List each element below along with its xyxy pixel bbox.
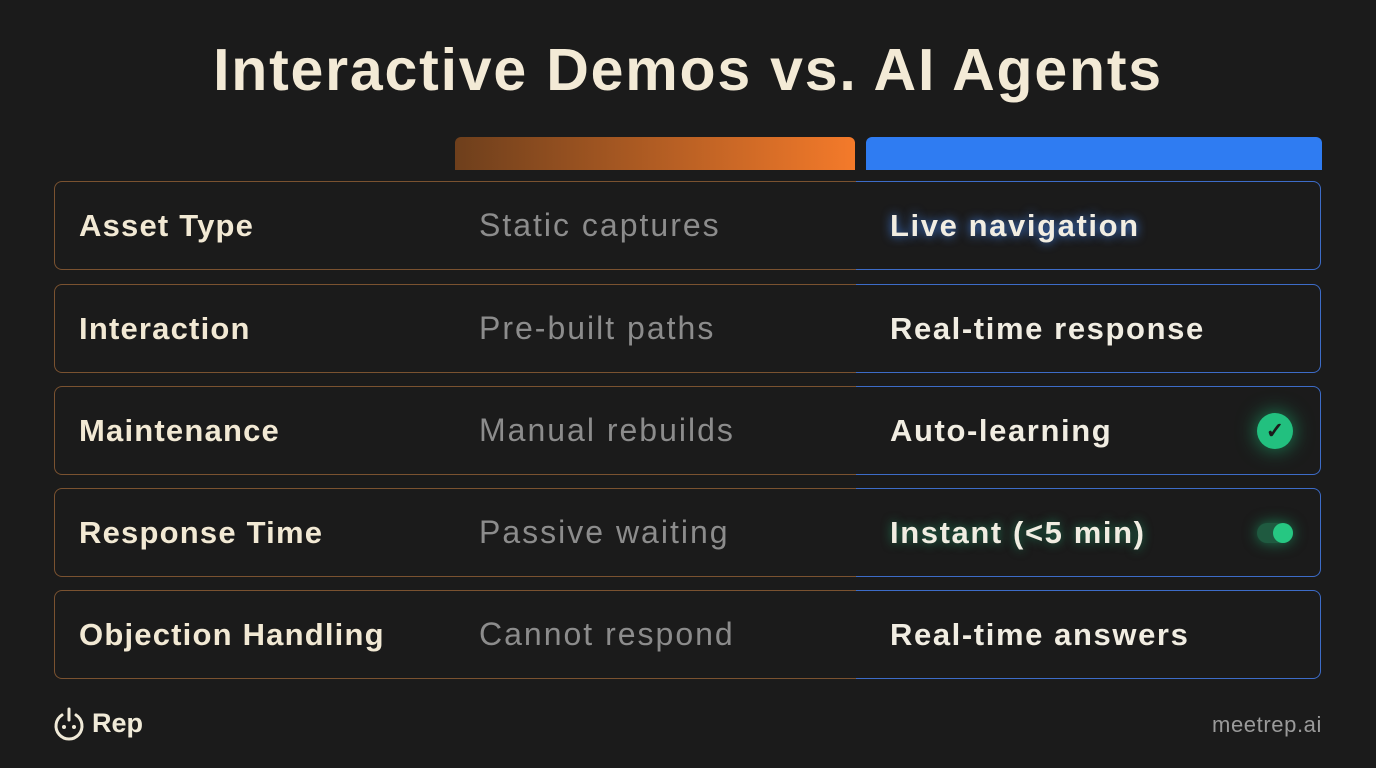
row: maintenance: Maintenance bbox=[79, 413, 280, 448]
row: maintenance: Auto-learning bbox=[890, 413, 1112, 448]
row: asset type: Asset Type bbox=[79, 208, 254, 243]
row: objection handling bbox=[54, 590, 1321, 679]
icon: check bbox=[1257, 413, 1293, 449]
header bar: AI agents bbox=[866, 137, 1322, 170]
header bar: interactive demos bbox=[455, 137, 855, 170]
row: response time bbox=[54, 488, 1321, 577]
logo: Rep bbox=[54, 708, 143, 740]
row: interaction: Interaction bbox=[79, 311, 251, 346]
row: interaction: Pre-built paths bbox=[479, 310, 715, 346]
row: objection handling: Cannot respond bbox=[479, 616, 735, 652]
row: response time: Response Time bbox=[79, 515, 323, 550]
row: objection handling: Real-time answers bbox=[890, 617, 1189, 652]
row: response time: Passive waiting bbox=[479, 514, 730, 550]
row: response time: Instant (<5 min) bbox=[890, 515, 1146, 550]
row: maintenance bbox=[54, 386, 1321, 475]
icon: toggle bbox=[1257, 523, 1293, 543]
title: Interactive Demos vs. AI Agents bbox=[213, 37, 1163, 103]
row: objection handling: Objection Handling bbox=[79, 617, 385, 652]
row: interaction: Real-time response bbox=[890, 311, 1205, 346]
logo: Rep: Rep bbox=[92, 708, 143, 738]
row: interaction bbox=[54, 284, 1321, 373]
footer url: meetrep.ai bbox=[1212, 712, 1322, 737]
icon: check: ✓ bbox=[1266, 418, 1284, 443]
row: maintenance: Manual rebuilds bbox=[479, 412, 735, 448]
row: asset type: Live navigation bbox=[890, 208, 1140, 243]
row: asset type: Static captures bbox=[479, 207, 721, 243]
row: asset type bbox=[54, 181, 1321, 270]
